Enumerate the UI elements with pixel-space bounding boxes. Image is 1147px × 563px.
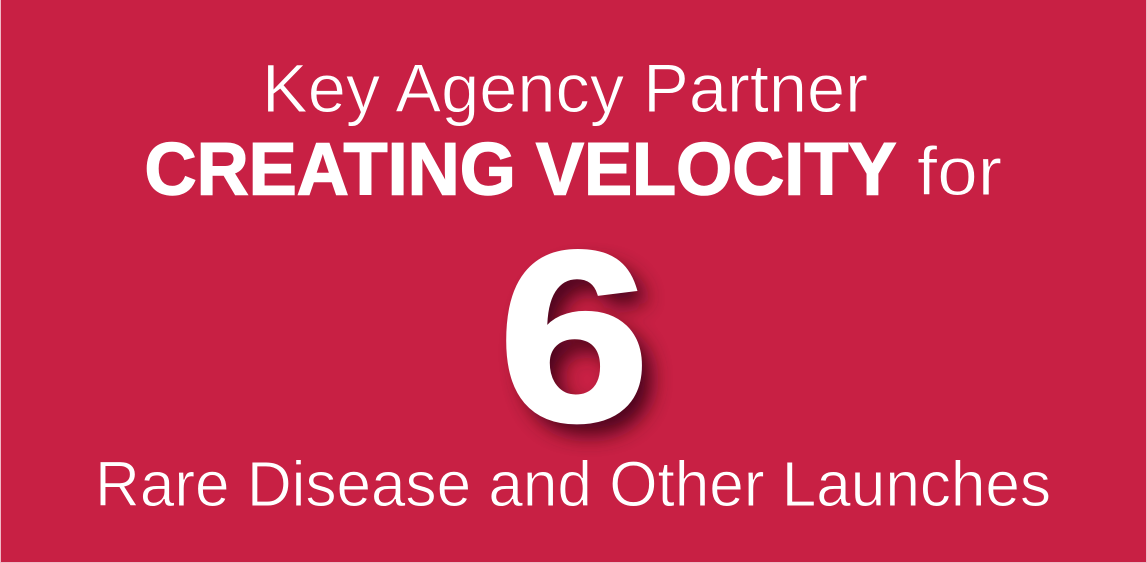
heading line 1: Key Agency Partner <box>262 50 868 127</box>
big number 6: 6 <box>510 215 662 485</box>
big number 6: 6 <box>498 202 650 472</box>
footer line: Rare Disease and Other Launches <box>95 448 1051 520</box>
heading line 2: CREATING VELOCITY <box>144 128 896 210</box>
heading line 2: for <box>917 133 1002 210</box>
